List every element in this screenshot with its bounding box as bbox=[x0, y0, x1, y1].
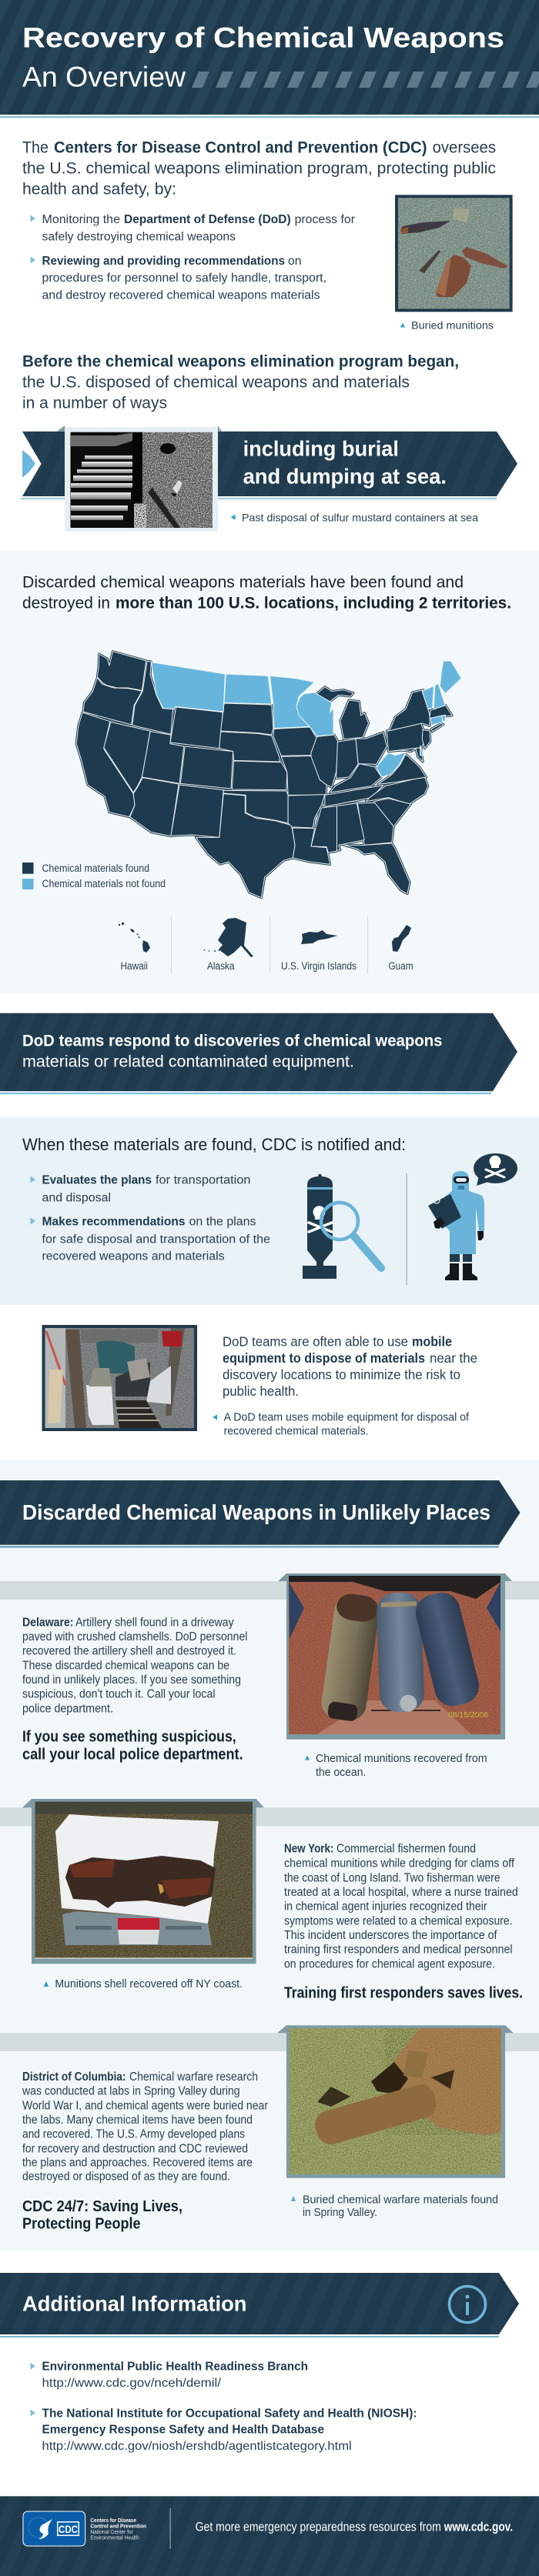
intro text: oversees bbox=[433, 139, 496, 157]
text: Delaware: paved with crushed clamshells. DoD personnel bbox=[22, 1630, 247, 1643]
text: Delaware: suspicious, don't touch it. Call your local bbox=[22, 1688, 216, 1701]
text: mobile equipment: near the bbox=[430, 1350, 477, 1366]
intro text: health and safety, by: bbox=[22, 181, 176, 199]
text: Delaware: police department. bbox=[22, 1702, 113, 1715]
photo date stamp: 08/15/2006 bbox=[448, 1711, 488, 1720]
inset: Hawaii bbox=[119, 923, 150, 972]
icon: bomb with magnifier bbox=[303, 1174, 381, 1279]
text: New York: This incident underscores the importance of bbox=[284, 1929, 497, 1942]
text: District of Columbia: the labs. Many chemical items have been found bbox=[22, 2114, 253, 2127]
legend: Chemical materials found bbox=[42, 863, 149, 874]
bullet list: CDC oversight roles: safely destroying chemical weapons bbox=[42, 230, 236, 243]
text: New York: the coast of Long Island. Two fisherman were bbox=[284, 1871, 500, 1884]
text: District of Columbia: World War I, and chemical agents were buried near bbox=[22, 2099, 268, 2112]
bullet list: CDC actions: and disposal bbox=[42, 1191, 111, 1204]
text: District of Columbia: was conducted at labs in Spring Valley during bbox=[22, 2085, 240, 2098]
banner text: including burial bbox=[243, 437, 399, 461]
resource links: http://www.cdc.gov/nceh/demil/ bbox=[42, 2377, 222, 2390]
photo: buried munitions bbox=[395, 195, 513, 312]
footer bbox=[0, 2496, 539, 2576]
bullet list: CDC actions: Evaluates the plans bbox=[42, 1174, 152, 1187]
agency name: Control and Prevention bbox=[90, 2523, 146, 2530]
resource links: http://www.cdc.gov/niosh/ershdb/agentlistcategory.html bbox=[42, 2440, 352, 2453]
caption: NY munitions shell: Munitions shell recovered off NY coast. bbox=[55, 1977, 243, 1990]
text: District of Columbia: District of Columbia: bbox=[22, 2070, 126, 2084]
banner text bbox=[243, 437, 447, 488]
section banner bbox=[0, 1480, 521, 1548]
section title: Additional Information bbox=[22, 2291, 246, 2315]
panel: discarded chemical weapons in unlikely places bbox=[0, 1460, 539, 2251]
intro text: The bbox=[22, 139, 49, 157]
icon: speech bubble with skull bbox=[474, 1153, 517, 1186]
resource links bbox=[31, 2361, 417, 2453]
intro text bbox=[22, 139, 496, 199]
legend bbox=[22, 863, 166, 889]
text: New York: symptoms were related to a chemical exposure. bbox=[284, 1914, 513, 1927]
text: before the elimination program: Before the chemical weapons elimination program began, bbox=[22, 353, 459, 371]
header banner bbox=[0, 0, 539, 118]
banner text bbox=[22, 1032, 442, 1071]
text: Delaware: Delaware: bbox=[22, 1616, 74, 1629]
text: mobile equipment: discovery locations to minimize the risk to bbox=[223, 1367, 460, 1383]
inset: Hawaii: Hawaii bbox=[120, 960, 148, 972]
title: Recovery of Chemical Weapons bbox=[22, 22, 504, 54]
agency name bbox=[90, 2517, 146, 2541]
bullet list: CDC oversight roles: process for bbox=[295, 213, 355, 226]
icon: information bbox=[450, 2287, 485, 2322]
bullet list: CDC oversight roles: procedures for personnel to safely handle, transport, bbox=[42, 272, 326, 285]
caption: Spring Valley: in Spring Valley. bbox=[303, 2207, 377, 2219]
intro text: Centers for Disease Control and Prevention (CDC) bbox=[54, 139, 427, 157]
section banner: additional information bbox=[0, 2273, 519, 2337]
text: mobile equipment: equipment to dispose of materials bbox=[223, 1350, 425, 1366]
bullet list: CDC actions: Makes recommendations bbox=[42, 1216, 185, 1229]
caption: Spring Valley: Buried chemical warfare materials found bbox=[303, 2194, 498, 2206]
agency name: Environmental Health bbox=[90, 2534, 139, 2541]
bullet list: CDC oversight roles bbox=[31, 213, 355, 302]
arrow banner: burial and dumping bbox=[21, 425, 517, 532]
text: New York: New York: bbox=[284, 1843, 334, 1856]
banner text: and dumping at sea. bbox=[243, 464, 447, 488]
callout: CDC 24/7: CDC 24/7: Saving Lives, bbox=[22, 2197, 182, 2215]
arrow banner: DoD teams respond bbox=[0, 1013, 517, 1094]
map heading: Discarded chemical weapons materials have been found and bbox=[22, 573, 464, 591]
map heading: more than 100 U.S. locations, including 2 territories. bbox=[116, 595, 511, 612]
panel: CDC notified bbox=[0, 1117, 539, 1305]
text: New York: in chemical agent injuries recognized their bbox=[284, 1900, 487, 1914]
CDC logo bbox=[23, 2511, 85, 2546]
callout: call your local police: If you see something suspicious, bbox=[22, 1727, 236, 1745]
footer message: Get more emergency preparedness resources from bbox=[196, 2520, 441, 2534]
inset: Guam bbox=[388, 925, 413, 972]
text: Delaware bbox=[22, 1616, 247, 1715]
bullet list: CDC actions: recovered weapons and materials bbox=[42, 1250, 225, 1263]
text: New York: treated at a local hospital, where a nurse trained bbox=[284, 1886, 518, 1899]
caption: munitions from ocean bbox=[305, 1753, 487, 1779]
CDC logo: CDC bbox=[59, 2523, 78, 2535]
panel heading: When these materials are found, CDC is notified and: bbox=[22, 1135, 406, 1154]
caption: buried munitions: Buried munitions bbox=[411, 319, 494, 331]
text: before the elimination program: in a number of ways bbox=[22, 395, 167, 412]
text: District of Columbia: for recovery and destruction and CDC reviewed bbox=[22, 2142, 248, 2155]
inset: U.S. Virgin Islands: U.S. Virgin Islands bbox=[281, 960, 357, 972]
section title: Discarded Chemical Weapons in Unlikely Places bbox=[22, 1500, 490, 1524]
text: Delaware: These discarded chemical weapons can be bbox=[22, 1659, 229, 1672]
text: New York: Commercial fishermen found bbox=[336, 1843, 476, 1856]
text: District of Columbia: and recovered. The U.S. Army developed plans bbox=[22, 2128, 245, 2141]
bullet list: CDC oversight roles: Department of Defense (DoD) bbox=[124, 213, 291, 226]
map heading: destroyed in bbox=[22, 595, 110, 612]
panel: map of locations bbox=[0, 551, 539, 993]
caption: mobile equipment: recovered chemical materials. bbox=[224, 1426, 369, 1438]
agency name: Centers for Disease bbox=[90, 2517, 136, 2524]
photo: chemical munitions from the ocean bbox=[278, 1573, 512, 1740]
bullet list: CDC actions: on the plans bbox=[189, 1216, 256, 1229]
callout: CDC 24/7: Protecting People bbox=[22, 2215, 141, 2233]
caption: past disposal: Past disposal of sulfur mustard containers at sea bbox=[242, 511, 478, 523]
text: mobile equipment: public health. bbox=[223, 1383, 299, 1399]
text: Delaware: found in unlikely places. If you see something bbox=[22, 1673, 241, 1687]
text: New York: chemical munitions while dredging for clams off bbox=[284, 1857, 515, 1870]
caption: mobile equipment bbox=[213, 1412, 470, 1438]
resource links: The National Institute for Occupational Safety and Health (NIOSH): bbox=[42, 2407, 417, 2420]
subtitle: An Overview bbox=[22, 62, 186, 93]
caption: Spring Valley bbox=[291, 2194, 498, 2219]
callout: CDC 24/7 bbox=[22, 2197, 182, 2233]
photo: DoD mobile equipment bbox=[42, 1325, 197, 1431]
inset: Alaska: Alaska bbox=[207, 960, 235, 972]
resource links: Emergency Response Safety and Health Database bbox=[42, 2424, 324, 2437]
text: before the elimination program: the U.S. disposed of chemical weapons and materials bbox=[22, 374, 410, 392]
bullet list: CDC actions: for safe disposal and transportation of the bbox=[42, 1233, 270, 1246]
map: contiguous United States bbox=[76, 652, 461, 898]
text: New York: training first responders and medical personnel bbox=[284, 1944, 513, 1957]
text: before the elimination program bbox=[22, 353, 459, 412]
text: District of Columbia: the plans and approaches. Recovered items are bbox=[22, 2156, 253, 2170]
bullet list: CDC oversight roles: and destroy recovered chemical weapons materials bbox=[42, 289, 320, 302]
photo: munitions shell off NY coast bbox=[22, 1799, 264, 1964]
legend: Chemical materials not found bbox=[42, 878, 166, 889]
bullet list: CDC oversight roles: on bbox=[288, 255, 302, 268]
bullet list: CDC oversight roles: Monitoring the bbox=[42, 213, 120, 226]
photo: buried materials in Spring Valley bbox=[277, 2025, 514, 2178]
resource links: Environmental Public Health Readiness Branch bbox=[42, 2361, 308, 2374]
text: mobile equipment: DoD teams are often able to use bbox=[223, 1333, 408, 1349]
text: mobile equipment bbox=[223, 1333, 477, 1399]
bullet list: CDC oversight roles: Reviewing and providing recommendations bbox=[42, 255, 285, 268]
footer message: www.cdc.gov. bbox=[444, 2520, 513, 2534]
caption: munitions from ocean: Chemical munitions recovered from bbox=[316, 1753, 487, 1765]
icon: person in protective suit bbox=[428, 1171, 484, 1280]
text: New York: on procedures for chemical agent exposure. bbox=[284, 1957, 495, 1970]
text: New York bbox=[284, 1843, 518, 1970]
photo: sulfur mustard containers disposal bbox=[65, 427, 218, 532]
callout: call your local police: call your local police department. bbox=[22, 1746, 243, 1763]
text: District of Columbia: Chemical warfare research bbox=[129, 2070, 258, 2084]
inset: Alaska bbox=[203, 918, 253, 972]
text: District of Columbia bbox=[22, 2070, 268, 2183]
bullet list: CDC actions bbox=[31, 1174, 270, 1263]
map heading bbox=[22, 573, 511, 612]
text: Delaware: recovered the artillery shell and destroyed it. bbox=[22, 1645, 236, 1658]
callout: call your local police bbox=[22, 1727, 243, 1763]
text: Delaware: Artillery shell found in a driveway bbox=[75, 1616, 234, 1629]
caption: munitions from ocean: the ocean. bbox=[316, 1767, 366, 1779]
text: mobile equipment: mobile bbox=[412, 1333, 452, 1349]
agency name: National Center for bbox=[90, 2528, 133, 2535]
banner text: DoD teams respond to discoveries of chemical weapons bbox=[22, 1032, 442, 1049]
text: District of Columbia: destroyed or disposed of as they are found. bbox=[22, 2170, 230, 2183]
intro text: the U.S. chemical weapons elimination program, protecting public bbox=[22, 160, 496, 178]
inset: Guam: Guam bbox=[388, 960, 413, 972]
banner text: materials or related contaminated equipment. bbox=[22, 1053, 354, 1071]
caption: mobile equipment: A DoD team uses mobile equipment for disposal of bbox=[224, 1412, 470, 1424]
bullet list: CDC actions: for transportation bbox=[156, 1174, 251, 1187]
inset: U.S. Virgin Islands bbox=[281, 930, 357, 972]
